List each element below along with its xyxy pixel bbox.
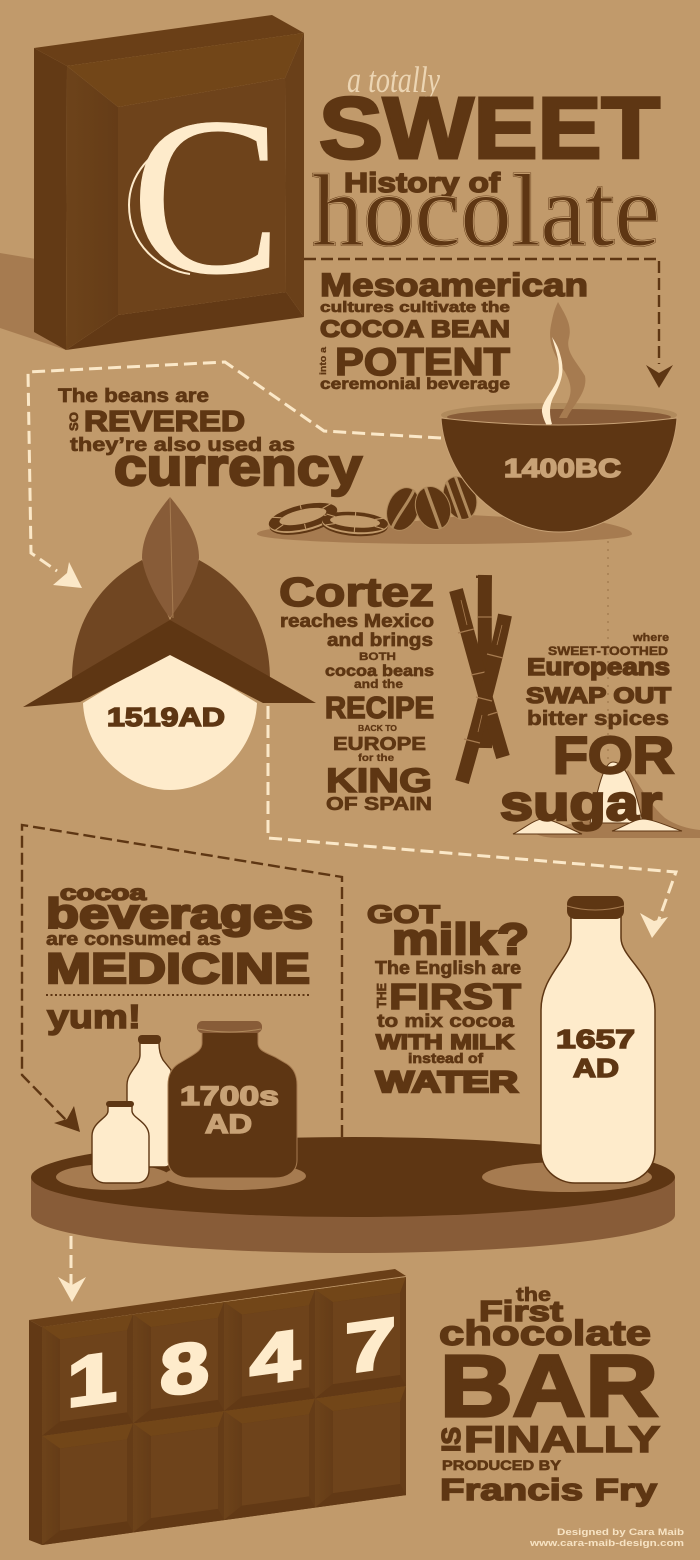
text: Mesoamerican: COCOA BEAN — [320, 316, 510, 343]
text: got milk: WITH MILK — [376, 1031, 514, 1054]
text: got milk — [367, 901, 529, 1099]
bowl 1400BC: 1400BC — [504, 453, 621, 483]
text: Cortez: Cortez — [279, 569, 434, 615]
sugar shadow — [533, 770, 700, 838]
text: Cortez: KING — [326, 762, 432, 800]
cream dashed arrow: to 1519AD — [28, 362, 441, 588]
text: Cortez: and the — [354, 677, 403, 691]
text: got milk: THE — [374, 983, 389, 1008]
text: medicine: cocoa — [60, 882, 146, 905]
text: first chocolate bar: chocolate — [439, 1314, 651, 1353]
chocolate bar 1847: 1 — [67, 1336, 117, 1422]
text: Cortez — [279, 569, 434, 814]
text: medicine: beverages — [46, 890, 313, 937]
text: got milk: instead of — [408, 1050, 483, 1066]
title: a totally — [347, 60, 440, 101]
chocolate bar 1847: 4 — [250, 1314, 300, 1400]
chocolate bar 1847 — [29, 1269, 406, 1545]
text: first chocolate bar: IS — [436, 1427, 466, 1452]
sugar cane — [456, 575, 505, 782]
text: medicine: are consumed as — [46, 929, 221, 949]
credits — [529, 1527, 684, 1549]
jar 1700s AD — [168, 1021, 297, 1178]
text: Cortez: BOTH — [359, 651, 396, 663]
milk bottle 1657 AD — [541, 896, 655, 1183]
credits: www.cara-maib-design.com — [529, 1538, 684, 1549]
chocolate bar 1847: 7 — [345, 1302, 396, 1388]
text: got milk: WATER — [376, 1066, 518, 1099]
cream dashed arrow: to 1657 AD — [268, 706, 676, 938]
text: Cortez: for the — [358, 753, 395, 764]
text: beans revered: SO — [67, 412, 81, 431]
text: Europeans swap: SWAP OUT — [526, 683, 672, 708]
text: Europeans swap: where — [632, 632, 669, 644]
text: Mesoamerican: Mesoamerican — [320, 267, 588, 303]
title: History of — [344, 167, 501, 198]
text: Cortez: EUROPE — [333, 734, 426, 754]
text: Mesoamerican: POTENT — [335, 341, 510, 384]
chocolate bar 1847: 8 — [160, 1326, 209, 1411]
text: Mesoamerican — [318, 267, 588, 393]
large chocolate piece with letter C — [34, 15, 304, 350]
text: medicine: yum! — [47, 998, 141, 1035]
conquistador helmet 1519AD: 1519AD — [107, 702, 225, 732]
text: Mesoamerican: ceremonial beverage — [320, 376, 510, 393]
conquistador helmet 1519AD — [23, 497, 316, 790]
text: Europeans swap: FOR — [553, 727, 674, 785]
platform — [31, 1137, 675, 1253]
text: beans revered — [58, 386, 363, 497]
text: beans revered: REVERED — [84, 406, 245, 438]
text: got milk: to mix cocoa — [377, 1011, 515, 1031]
text: first chocolate bar: BAR — [440, 1338, 658, 1435]
text: Mesoamerican: into a — [318, 346, 328, 375]
text: got milk: FIRST — [389, 976, 521, 1017]
bowl 1400BC — [441, 302, 677, 532]
text: first chocolate bar — [436, 1285, 660, 1507]
milk bottle 1657 AD: AD — [573, 1053, 619, 1083]
text: Cortez: BACK TO — [358, 723, 397, 733]
cocoa beans — [381, 472, 483, 535]
title: hocolate — [312, 154, 660, 268]
steam — [542, 302, 585, 426]
text: Europeans swap — [500, 632, 674, 831]
text: beans revered: currency — [114, 438, 363, 497]
text: Europeans swap: bitter spices — [527, 708, 669, 730]
large chocolate piece with letter C: C — [131, 71, 282, 321]
milk bottle 1657 AD: 1657 — [556, 1024, 635, 1054]
text: got milk: milk? — [392, 915, 529, 964]
text: beans revered: they’re also used as — [70, 435, 295, 456]
sugar pile: right — [612, 819, 682, 831]
text: beans revered: The beans are — [58, 386, 209, 407]
text: first chocolate bar: FINALLY — [464, 1419, 660, 1460]
tall milk bottle — [127, 1035, 171, 1167]
text: Cortez: cocoa beans — [325, 663, 434, 680]
dark dashed arrow: to 1700s AD — [22, 825, 342, 1137]
text: first chocolate bar: the — [516, 1285, 551, 1306]
text: medicine — [46, 882, 313, 1035]
dotted line — [607, 541, 609, 760]
text: Europeans swap: SWEET-TOOTHED — [548, 644, 668, 658]
sugar pile: left — [513, 819, 582, 834]
sugar pile: main — [590, 762, 643, 823]
text: medicine: MEDICINE — [46, 945, 310, 993]
small milk bottle — [92, 1101, 149, 1183]
text: got milk: GOT — [367, 901, 440, 929]
jar 1700s AD: AD — [205, 1109, 252, 1139]
text: Cortez: and brings — [327, 630, 433, 650]
text: Cortez: RECIPE — [325, 690, 434, 725]
text: first chocolate bar: Francis Fry — [440, 1472, 658, 1507]
text: Cortez: reaches Mexico — [280, 611, 434, 631]
shadow of large chocolate piece — [0, 253, 66, 350]
text: Europeans swap: sugar — [500, 775, 662, 831]
text: got milk: The English are — [375, 958, 521, 978]
title — [312, 60, 660, 268]
jar 1700s AD: 1700s — [180, 1081, 279, 1111]
coins — [266, 497, 389, 540]
credits: Designed by Cara Maib — [557, 1527, 684, 1538]
text: Cortez: OF SPAIN — [326, 794, 432, 814]
title: SWEET — [319, 80, 660, 177]
text: Europeans swap: Europeans — [527, 654, 670, 681]
arrow: bar to 1400BC — [304, 259, 673, 388]
text: first chocolate bar: First — [479, 1296, 563, 1328]
cream arrow: to 1847 — [58, 1236, 86, 1302]
shadow under bowl and coins — [257, 515, 632, 544]
text: first chocolate bar: PRODUCED BY — [442, 1457, 562, 1473]
text: Mesoamerican: cultures cultivate the — [320, 299, 510, 316]
